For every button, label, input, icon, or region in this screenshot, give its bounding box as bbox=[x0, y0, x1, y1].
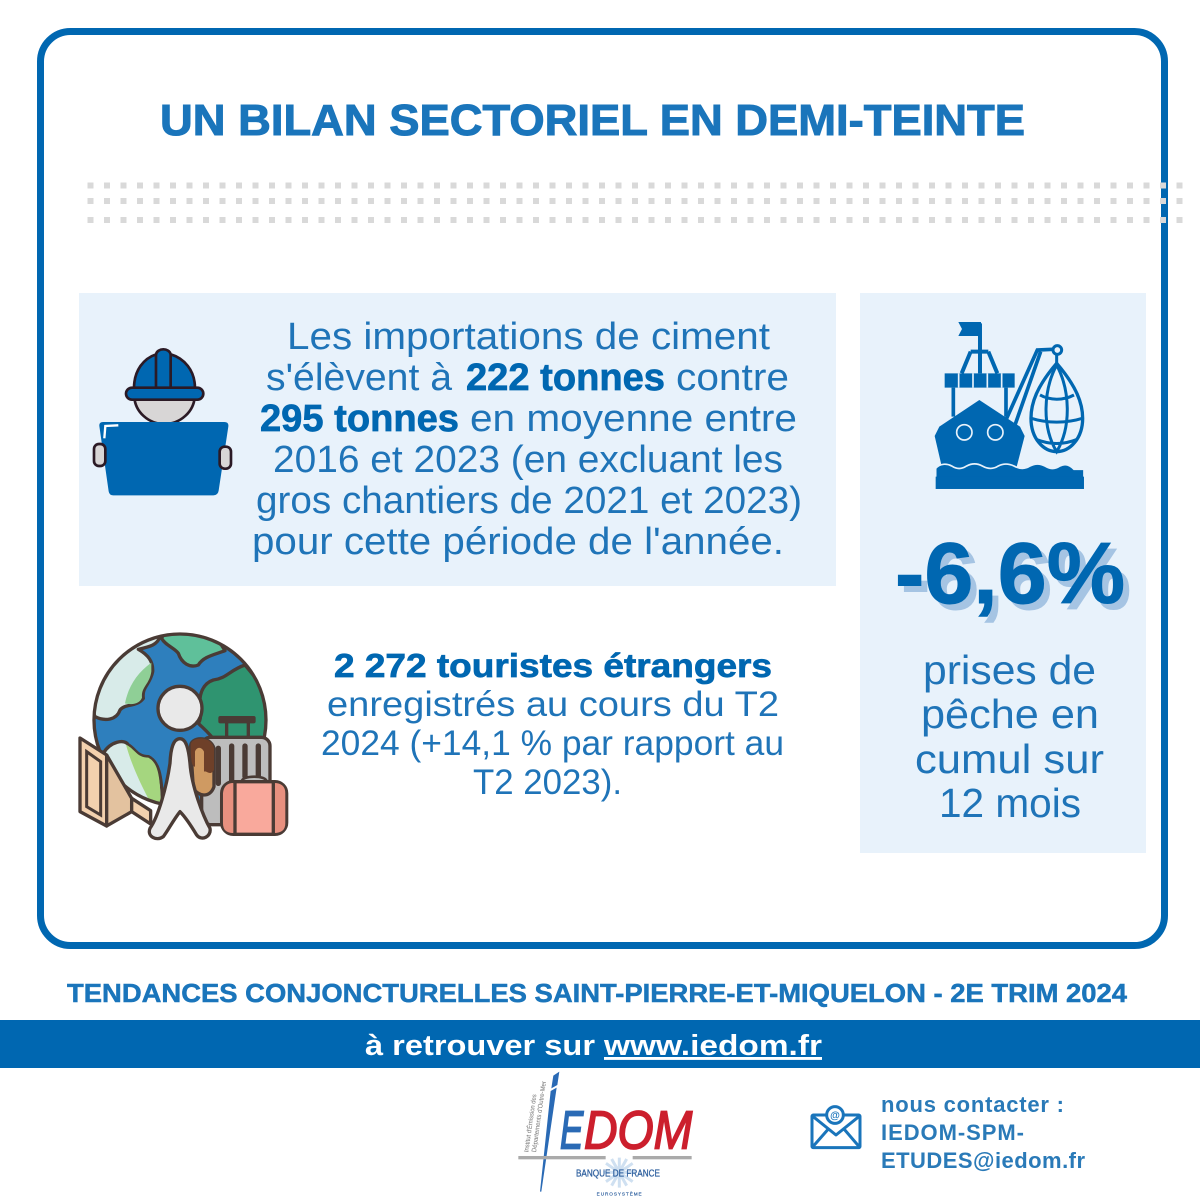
text: foreign tourists: enregistrés au cours du T2 bbox=[327, 685, 779, 724]
contact text: nous contacter : bbox=[881, 1092, 1064, 1117]
icon: worker with helmet holding a board bbox=[94, 349, 231, 495]
panel: fishing bbox=[860, 293, 1146, 853]
text: fishing catches: prises de bbox=[923, 647, 1096, 693]
logo: IEDOM: BANQUE DE FRANCE bbox=[576, 1168, 660, 1179]
logo: IEDOM: Départements d'Outre-Mer bbox=[531, 1080, 548, 1153]
text: cement imports: gros chantiers de 2021 et 2023) bbox=[256, 480, 802, 522]
icon: fishing boat with net bbox=[935, 322, 1084, 489]
contact text: ETUDES@iedom.fr bbox=[881, 1148, 1085, 1173]
logo: IEDOM: DOM bbox=[584, 1101, 693, 1160]
text: cement imports bbox=[252, 316, 802, 563]
pink case bbox=[222, 777, 287, 834]
logo: IEDOM: E bbox=[560, 1101, 584, 1160]
icon: globe, traveller, map and luggage bbox=[80, 627, 287, 839]
text: cement imports: 295 tonnes bbox=[260, 398, 459, 440]
text: cement imports: pour cette période de l'année. bbox=[252, 521, 784, 563]
icon: envelope with at sign: @ bbox=[830, 1110, 840, 1121]
contact text bbox=[881, 1092, 1085, 1173]
title: UN BILAN SECTORIEL EN DEMI-TEINTE bbox=[160, 96, 1025, 145]
contact text: IEDOM-SPM- bbox=[881, 1120, 1024, 1145]
icon: envelope with at sign bbox=[812, 1107, 860, 1148]
big number: -6,6% bbox=[901, 532, 1131, 628]
text: foreign tourists: 2024 (+14,1 % par rapport au bbox=[321, 724, 784, 763]
folded map bbox=[80, 738, 151, 826]
text: cement imports: contre bbox=[676, 357, 789, 399]
big number: -6,6% bbox=[895, 526, 1125, 622]
globe bbox=[92, 632, 268, 805]
footer bar: www.iedom.fr bbox=[603, 1030, 822, 1062]
text: foreign tourists: 2 272 touristes étrangers bbox=[334, 647, 772, 684]
logo: IEDOM bbox=[518, 1072, 693, 1197]
text: fishing catches bbox=[915, 647, 1104, 826]
footer bar: à retrouver sur bbox=[365, 1030, 595, 1062]
publication line: TENDANCES CONJONCTURELLES SAINT-PIERRE-ET-MIQUELON - 2E TRIM 2024 bbox=[67, 978, 1128, 1008]
text: cement imports: Les importations de ciment bbox=[287, 316, 770, 358]
text: cement imports: 2016 et 2023 (en excluant les bbox=[273, 439, 783, 481]
text: fishing catches: cumul sur bbox=[915, 736, 1104, 782]
text: fishing catches: pêche en bbox=[921, 691, 1099, 737]
text: cement imports: 222 tonnes bbox=[466, 357, 665, 399]
main frame bbox=[40, 32, 1164, 946]
text: foreign tourists: T2 2023). bbox=[473, 763, 622, 802]
text: foreign tourists bbox=[321, 647, 784, 802]
traveller bbox=[149, 686, 210, 839]
text: fishing catches: 12 mois bbox=[939, 780, 1081, 826]
text: cement imports: en moyenne entre bbox=[470, 398, 797, 440]
suitcase bbox=[202, 716, 270, 825]
logo: IEDOM: EUROSYSTÈME bbox=[597, 1191, 642, 1197]
logo: IEDOM: Institut d'Émission des bbox=[521, 1093, 539, 1153]
panel: cement imports bbox=[79, 293, 836, 586]
text: cement imports: s'élèvent à bbox=[266, 357, 453, 399]
footer bar bbox=[0, 1020, 1200, 1068]
backpack bbox=[191, 739, 214, 795]
